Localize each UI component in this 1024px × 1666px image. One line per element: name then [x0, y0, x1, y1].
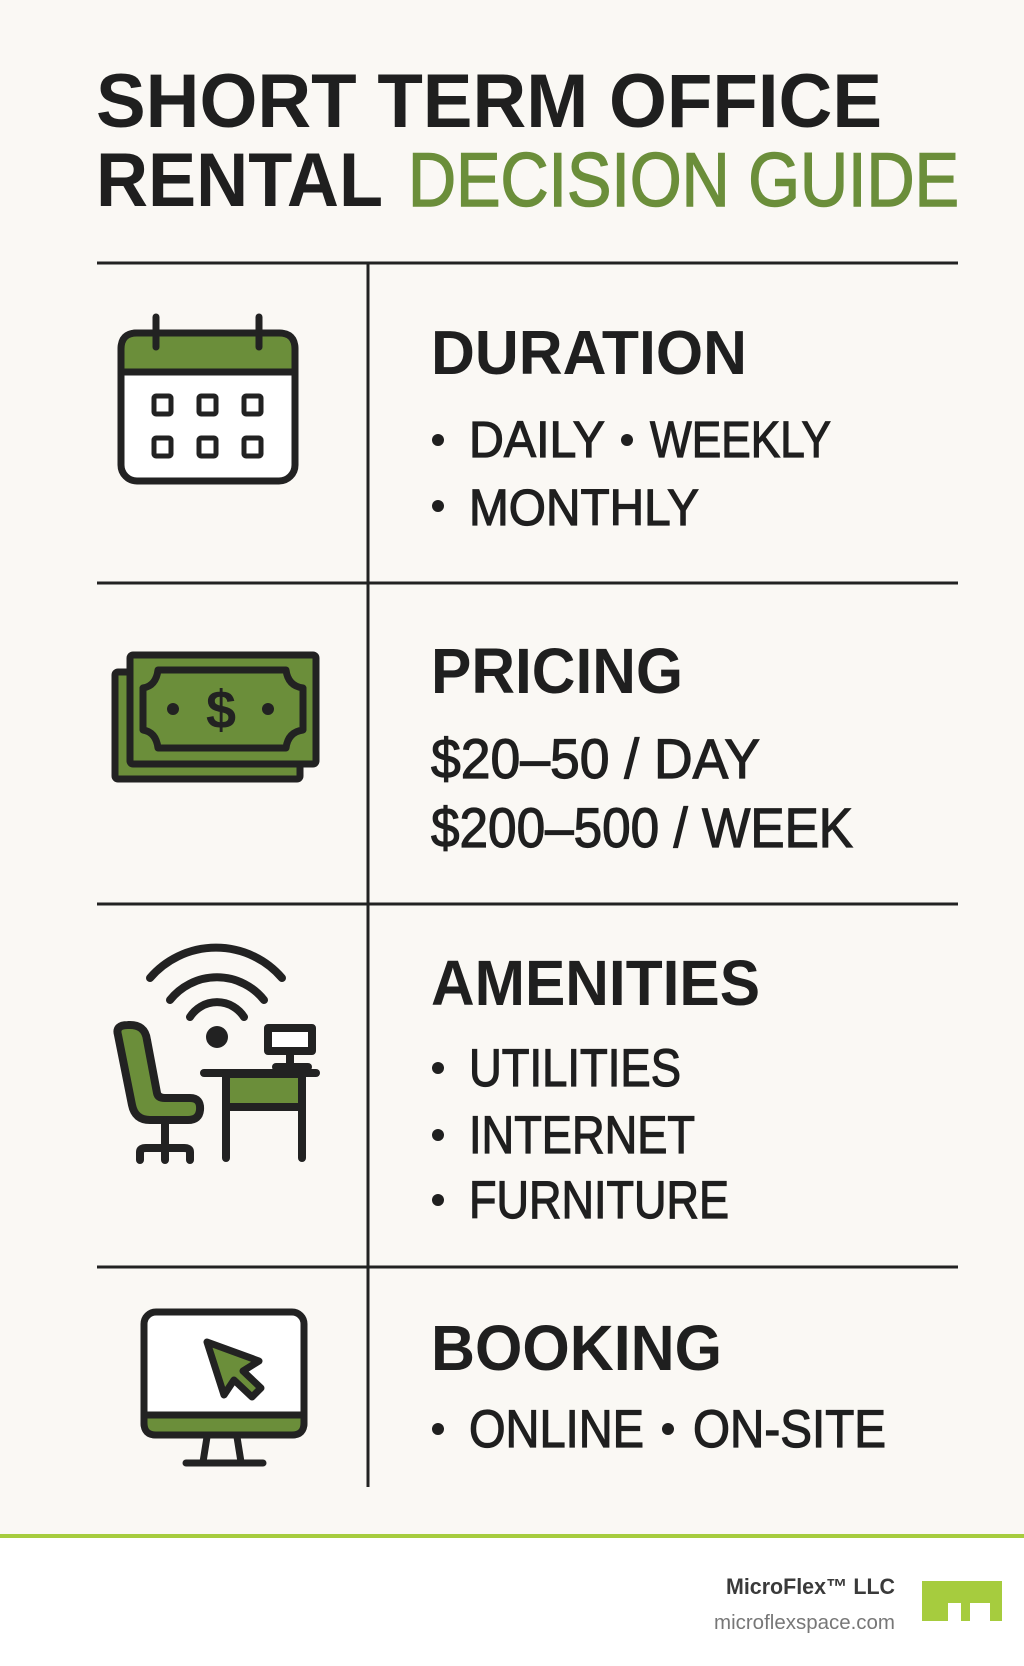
title	[96, 59, 959, 223]
panel: duration: DAILY	[469, 411, 605, 468]
panel: booking: ON-SITE	[693, 1400, 886, 1459]
panel: pricing: $20–50 / DAY	[431, 727, 760, 790]
footer: company: MicroFlex™ LLC	[726, 1574, 895, 1599]
title: SHORT TERM OFFICE	[96, 59, 882, 144]
icon: calendar	[121, 317, 295, 481]
panel: amenities: INTERNET	[469, 1106, 695, 1165]
panel: booking: BOOKING	[431, 1312, 722, 1384]
panel: duration: MONTHLY	[469, 479, 699, 536]
icon: workspace	[117, 948, 316, 1160]
logo	[922, 1581, 1002, 1621]
icon: computer	[144, 1312, 304, 1463]
footer: company	[714, 1574, 895, 1634]
panel: pricing: PRICING	[431, 635, 683, 707]
panel: amenities: FURNITURE	[469, 1171, 729, 1230]
panel: pricing	[431, 635, 853, 859]
footer: company: microflexspace.com	[714, 1612, 895, 1634]
panel: duration	[431, 319, 831, 536]
panel: amenities: AMENITIES	[431, 947, 760, 1019]
title: DECISION GUIDE	[408, 138, 959, 223]
panel: duration: DURATION	[431, 319, 747, 388]
icon: money	[115, 655, 316, 779]
panel: duration: WEEKLY	[650, 411, 831, 468]
panel: booking: ONLINE	[469, 1400, 644, 1459]
panel: pricing: $200–500 / WEEK	[431, 796, 853, 859]
panel: amenities: UTILITIES	[469, 1039, 681, 1098]
panel: booking	[431, 1312, 886, 1459]
icon: money: $	[206, 680, 236, 740]
title: RENTAL	[96, 138, 383, 223]
panel: amenities	[431, 947, 760, 1230]
